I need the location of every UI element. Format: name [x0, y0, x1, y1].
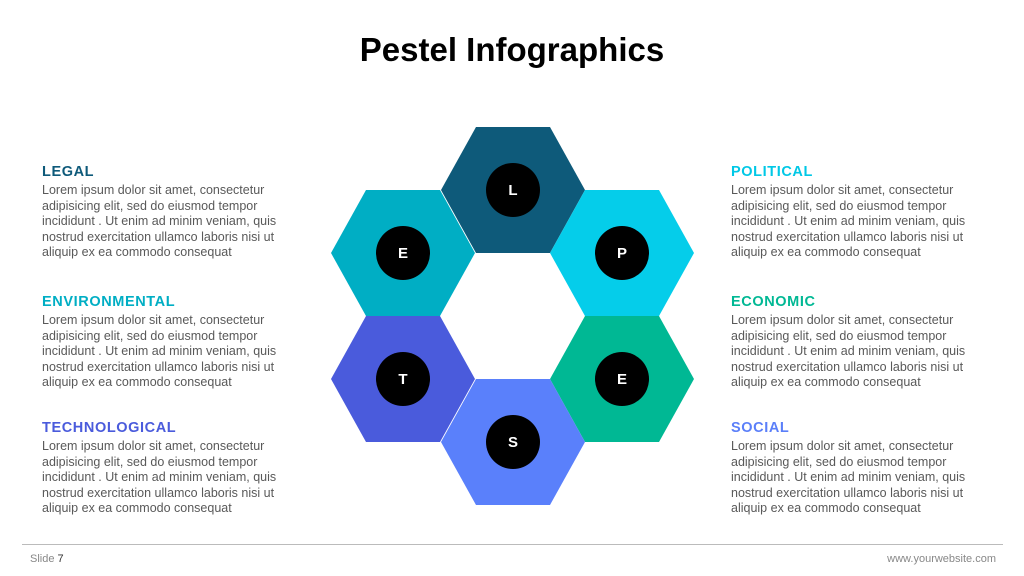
text block: legal: LEGAL: [42, 164, 94, 180]
hexagon: L: L: [508, 182, 518, 199]
hexagon: E environmental: [331, 190, 475, 316]
text block: legal: nostrud exercitation ullamco laboris nisi ut: [42, 230, 274, 244]
text block: legal: [42, 164, 276, 259]
text block: environmental: adipisicing elit, sed do eiusmod tempor: [42, 329, 257, 343]
text block: political: POLITICAL: [731, 164, 813, 180]
text block: environmental: incididunt . Ut enim ad minim veniam, quis: [42, 344, 276, 358]
hexagon: E economic: [550, 316, 694, 442]
text block: technological: aliquip ex ea commodo consequat: [42, 501, 232, 515]
text block: social: aliquip ex ea commodo consequat: [731, 501, 921, 515]
text block: political: nostrud exercitation ullamco laboris nisi ut: [731, 230, 963, 244]
hexagon: E economic: E: [617, 371, 627, 388]
text block: environmental: Lorem ipsum dolor sit amet, consectetur: [42, 313, 264, 327]
text block: economic: nostrud exercitation ullamco laboris nisi ut: [731, 360, 963, 374]
title: Pestel Infographics: [360, 31, 664, 68]
text block: economic: ECONOMIC: [731, 294, 816, 310]
footer: slide number: Slide 7: [30, 553, 64, 565]
text block: technological: nostrud exercitation ullamco laboris nisi ut: [42, 486, 274, 500]
text block: social: incididunt . Ut enim ad minim veniam, quis: [731, 470, 965, 484]
hexagon: S: [441, 379, 585, 505]
text block: political: adipisicing elit, sed do eiusmod tempor: [731, 199, 946, 213]
text block: environmental: [42, 294, 276, 389]
text block: environmental: ENVIRONMENTAL: [42, 294, 175, 310]
text block: legal: incididunt . Ut enim ad minim veniam, quis: [42, 214, 276, 228]
text block: political: aliquip ex ea commodo consequat: [731, 245, 921, 259]
text block: social: adipisicing elit, sed do eiusmod tempor: [731, 455, 946, 469]
text block: political: incididunt . Ut enim ad minim veniam, quis: [731, 214, 965, 228]
text block: economic: Lorem ipsum dolor sit amet, consectetur: [731, 313, 953, 327]
hexagon: T: [331, 316, 475, 442]
hexagon: L: [441, 127, 585, 253]
text block: economic: adipisicing elit, sed do eiusmod tempor: [731, 329, 946, 343]
hexagon: P: [550, 190, 694, 316]
text block: political: Lorem ipsum dolor sit amet, consectetur: [731, 183, 953, 197]
hexagon: S: S: [508, 434, 518, 451]
text block: technological: adipisicing elit, sed do eiusmod tempor: [42, 455, 257, 469]
text block: environmental: nostrud exercitation ullamco laboris nisi ut: [42, 360, 274, 374]
text block: economic: [731, 294, 965, 389]
text block: technological: incididunt . Ut enim ad minim veniam, quis: [42, 470, 276, 484]
text block: economic: incididunt . Ut enim ad minim veniam, quis: [731, 344, 965, 358]
text block: social: SOCIAL: [731, 420, 789, 436]
text block: political: [731, 164, 965, 259]
text block: technological: TECHNOLOGICAL: [42, 420, 176, 436]
hexagon: E environmental: E: [398, 245, 408, 262]
text block: technological: Lorem ipsum dolor sit amet, consectetur: [42, 439, 264, 453]
footer: website: www.yourwebsite.com: [887, 553, 996, 565]
hexagon: P: P: [617, 245, 627, 262]
text block: social: nostrud exercitation ullamco laboris nisi ut: [731, 486, 963, 500]
text block: social: Lorem ipsum dolor sit amet, consectetur: [731, 439, 953, 453]
text block: environmental: aliquip ex ea commodo consequat: [42, 375, 232, 389]
text block: legal: Lorem ipsum dolor sit amet, consectetur: [42, 183, 264, 197]
text block: social: [731, 420, 965, 515]
hexagon: T: T: [398, 371, 408, 388]
text block: legal: aliquip ex ea commodo consequat: [42, 245, 232, 259]
text block: economic: aliquip ex ea commodo consequat: [731, 375, 921, 389]
text block: technological: [42, 420, 276, 515]
text block: legal: adipisicing elit, sed do eiusmod tempor: [42, 199, 257, 213]
